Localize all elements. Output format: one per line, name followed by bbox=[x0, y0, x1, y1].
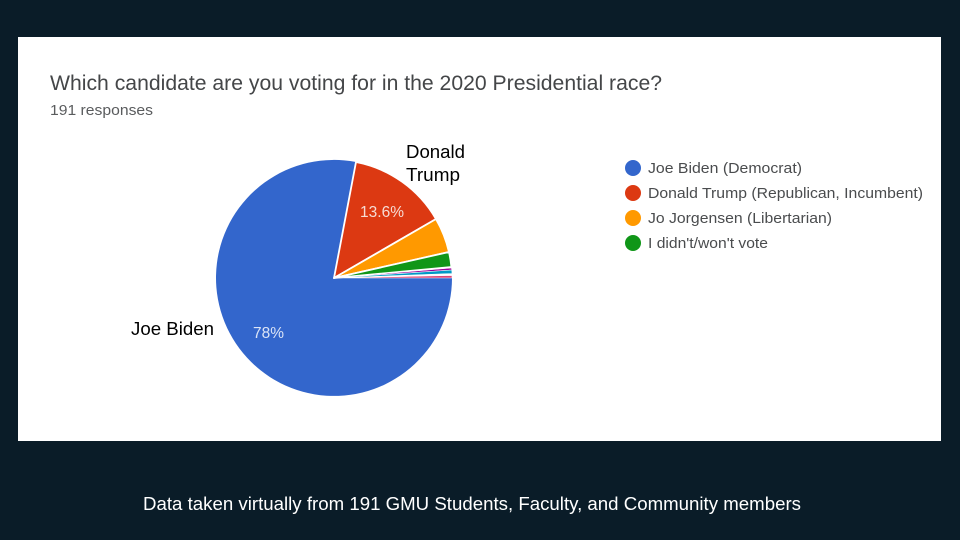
legend item: Donald Trump: Donald Trump (Republican, Incumbent) bbox=[648, 186, 923, 202]
text: response count: 191 responses bbox=[50, 103, 153, 119]
pie slice: other teal bbox=[334, 270, 452, 278]
legend item: Jo Jorgensen: Jo Jorgensen (Libertarian) bbox=[648, 211, 832, 227]
label: Trump percentage: 13.6% bbox=[360, 204, 404, 221]
pie slice: other pink bbox=[334, 276, 452, 278]
legend item: Joe Biden: Joe Biden (Democrat) bbox=[648, 161, 802, 177]
legend bbox=[625, 160, 923, 252]
annotation: Donald Trump bbox=[406, 141, 465, 185]
pie slice: other purple bbox=[334, 268, 452, 278]
panel: survey chart card bbox=[18, 37, 941, 441]
pie slice: Joe Biden bbox=[216, 160, 452, 396]
annotation: Donald Trump: Donald bbox=[406, 141, 465, 162]
annotation: Donald Trump: Trump bbox=[406, 164, 460, 185]
legend item: did not vote: I didn't/won't vote bbox=[648, 236, 768, 252]
heading: survey question: Which candidate are you voting for in the 2020 Presidential race? bbox=[50, 72, 662, 95]
pie slice: Donald Trump bbox=[334, 162, 436, 278]
label: Biden percentage: 78% bbox=[253, 325, 284, 342]
caption: data source: Data taken virtually from 191 GMU Students, Faculty, and Community members bbox=[143, 494, 801, 514]
pie chart: candidate shares bbox=[216, 160, 452, 396]
pie slice: did not vote bbox=[334, 252, 451, 278]
annotation: Joe Biden: Joe Biden bbox=[131, 318, 214, 339]
pie slice: Jo Jorgensen bbox=[334, 219, 449, 278]
